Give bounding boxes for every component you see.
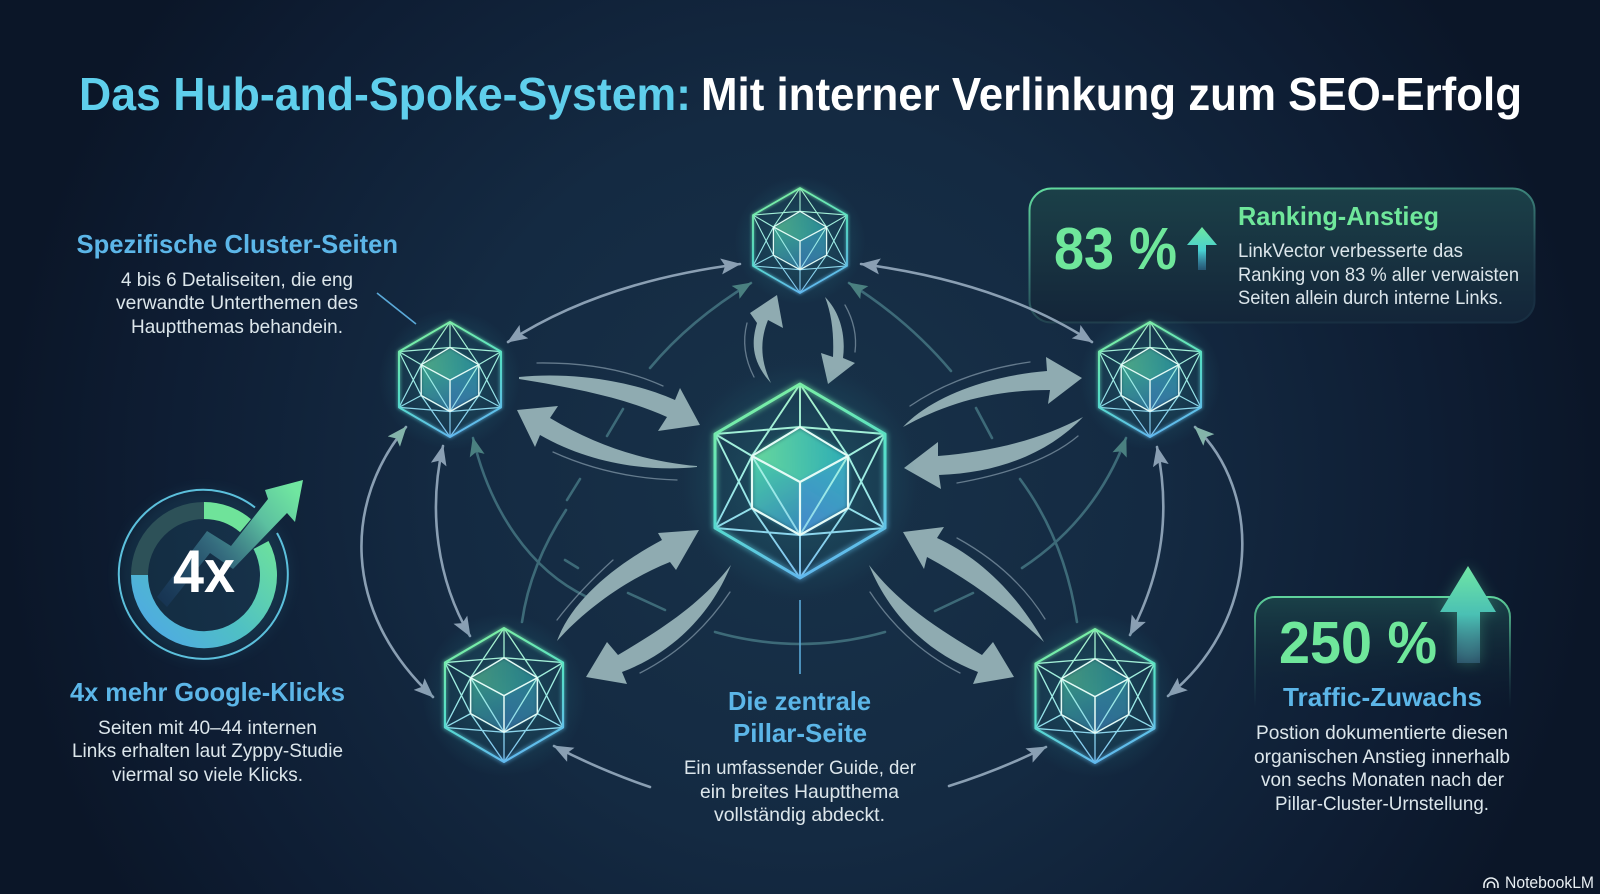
faint connection lines (473, 283, 1126, 644)
icon: cluster hexagon top (735, 177, 865, 304)
text: Traffic-Zuwachs: Postion dokumentierte diesen (1256, 722, 1508, 744)
text: Die zentrale Pillar-Seite: vollständig abdeckt. (714, 804, 885, 826)
title: Das Hub-and-Spoke-System: (79, 68, 691, 120)
stat: 83 % with arrow: 83 % (1054, 216, 1177, 282)
panel: Traffic-Zuwachs background (1255, 597, 1510, 708)
hub arrows: lower left cluster (557, 530, 731, 684)
text: Traffic-Zuwachs: von sechs Monaten nach der (1261, 769, 1504, 791)
text: Die zentrale Pillar-Seite: ein breites Hauptthema (700, 781, 899, 803)
icon: cluster hexagon lower left (422, 614, 586, 776)
panel: Traffic-Zuwachs border (1255, 597, 1510, 708)
text: Traffic-Zuwachs: organischen Anstieg innerhalb (1254, 746, 1510, 768)
thin arrows between cluster pages (361, 264, 1242, 787)
text: Spezifische Cluster-Seiten: Spezifische Cluster-Seiten (76, 229, 398, 259)
text: Traffic-Zuwachs (1254, 682, 1510, 815)
text: Die zentrale Pillar-Seite: Die zentrale (728, 686, 871, 716)
text: 4x mehr Google-Klicks: viermal so viele Klicks. (112, 764, 303, 786)
text: Ranking-Anstieg: Ranking von 83 % aller verwaisten (1238, 264, 1519, 286)
title: Mit interner Verlinkung zum SEO-Erfolg (701, 68, 1522, 120)
text: 4x mehr Google-Klicks: Links erhalten laut Zyppy-Studie (72, 740, 343, 762)
hub arrows: left cluster (517, 363, 700, 480)
text: Ranking-Anstieg: LinkVector verbesserte das (1238, 240, 1463, 262)
text: Die zentrale Pillar-Seite: Ein umfassender Guide, der (684, 757, 916, 779)
decorative leaders (377, 293, 800, 674)
text: Spezifische Cluster-Seiten: 4 bis 6 Detaliseiten, die eng (121, 269, 353, 291)
text: Spezifische Cluster-Seiten (76, 229, 398, 338)
text: Spezifische Cluster-Seiten: verwandte Unterthemen des (116, 292, 358, 314)
icon: cluster hexagon left (379, 310, 521, 449)
title (79, 68, 1522, 120)
text: Traffic-Zuwachs: Traffic-Zuwachs (1283, 682, 1482, 712)
text: Ranking-Anstieg: Ranking-Anstieg (1238, 201, 1439, 231)
stat: 250 % with arrow: 250 % (1279, 610, 1437, 676)
text: 4x mehr Google-Klicks: 4x mehr Google-Klicks (70, 677, 345, 707)
text: Die zentrale Pillar-Seite: Pillar-Seite (733, 718, 867, 748)
icon: 4x ring with rising arrow: 4x (173, 538, 235, 605)
text: Spezifische Cluster-Seiten: Hauptthemas behandein. (131, 316, 343, 338)
icon: cluster hexagon lower right (1012, 615, 1178, 777)
text: 4x mehr Google-Klicks: Seiten mit 40–44 internen (98, 717, 317, 739)
hub arrows: lower right cluster (869, 527, 1045, 684)
text: Die zentrale Pillar-Seite (684, 686, 916, 826)
text: Ranking-Anstieg (1238, 201, 1519, 309)
text: Ranking-Anstieg: Seiten allein durch interne Links. (1238, 287, 1503, 309)
panel: Ranking-Anstieg background (1030, 188, 1534, 322)
hub arrows: right cluster (903, 357, 1083, 489)
hub arrows: top cluster (745, 295, 856, 384)
icon: hub hexagon centre (682, 363, 918, 599)
icon: 4x ring with rising arrow (119, 480, 303, 660)
text: 4x mehr Google-Klicks (70, 677, 345, 786)
text: Traffic-Zuwachs: Pillar-Cluster-Urnstellung. (1275, 793, 1489, 815)
stat: 250 % with arrow (1279, 566, 1496, 676)
logo: NotebookLM: NotebookLM (1505, 873, 1594, 892)
icon: cluster hexagon right (1079, 310, 1221, 449)
